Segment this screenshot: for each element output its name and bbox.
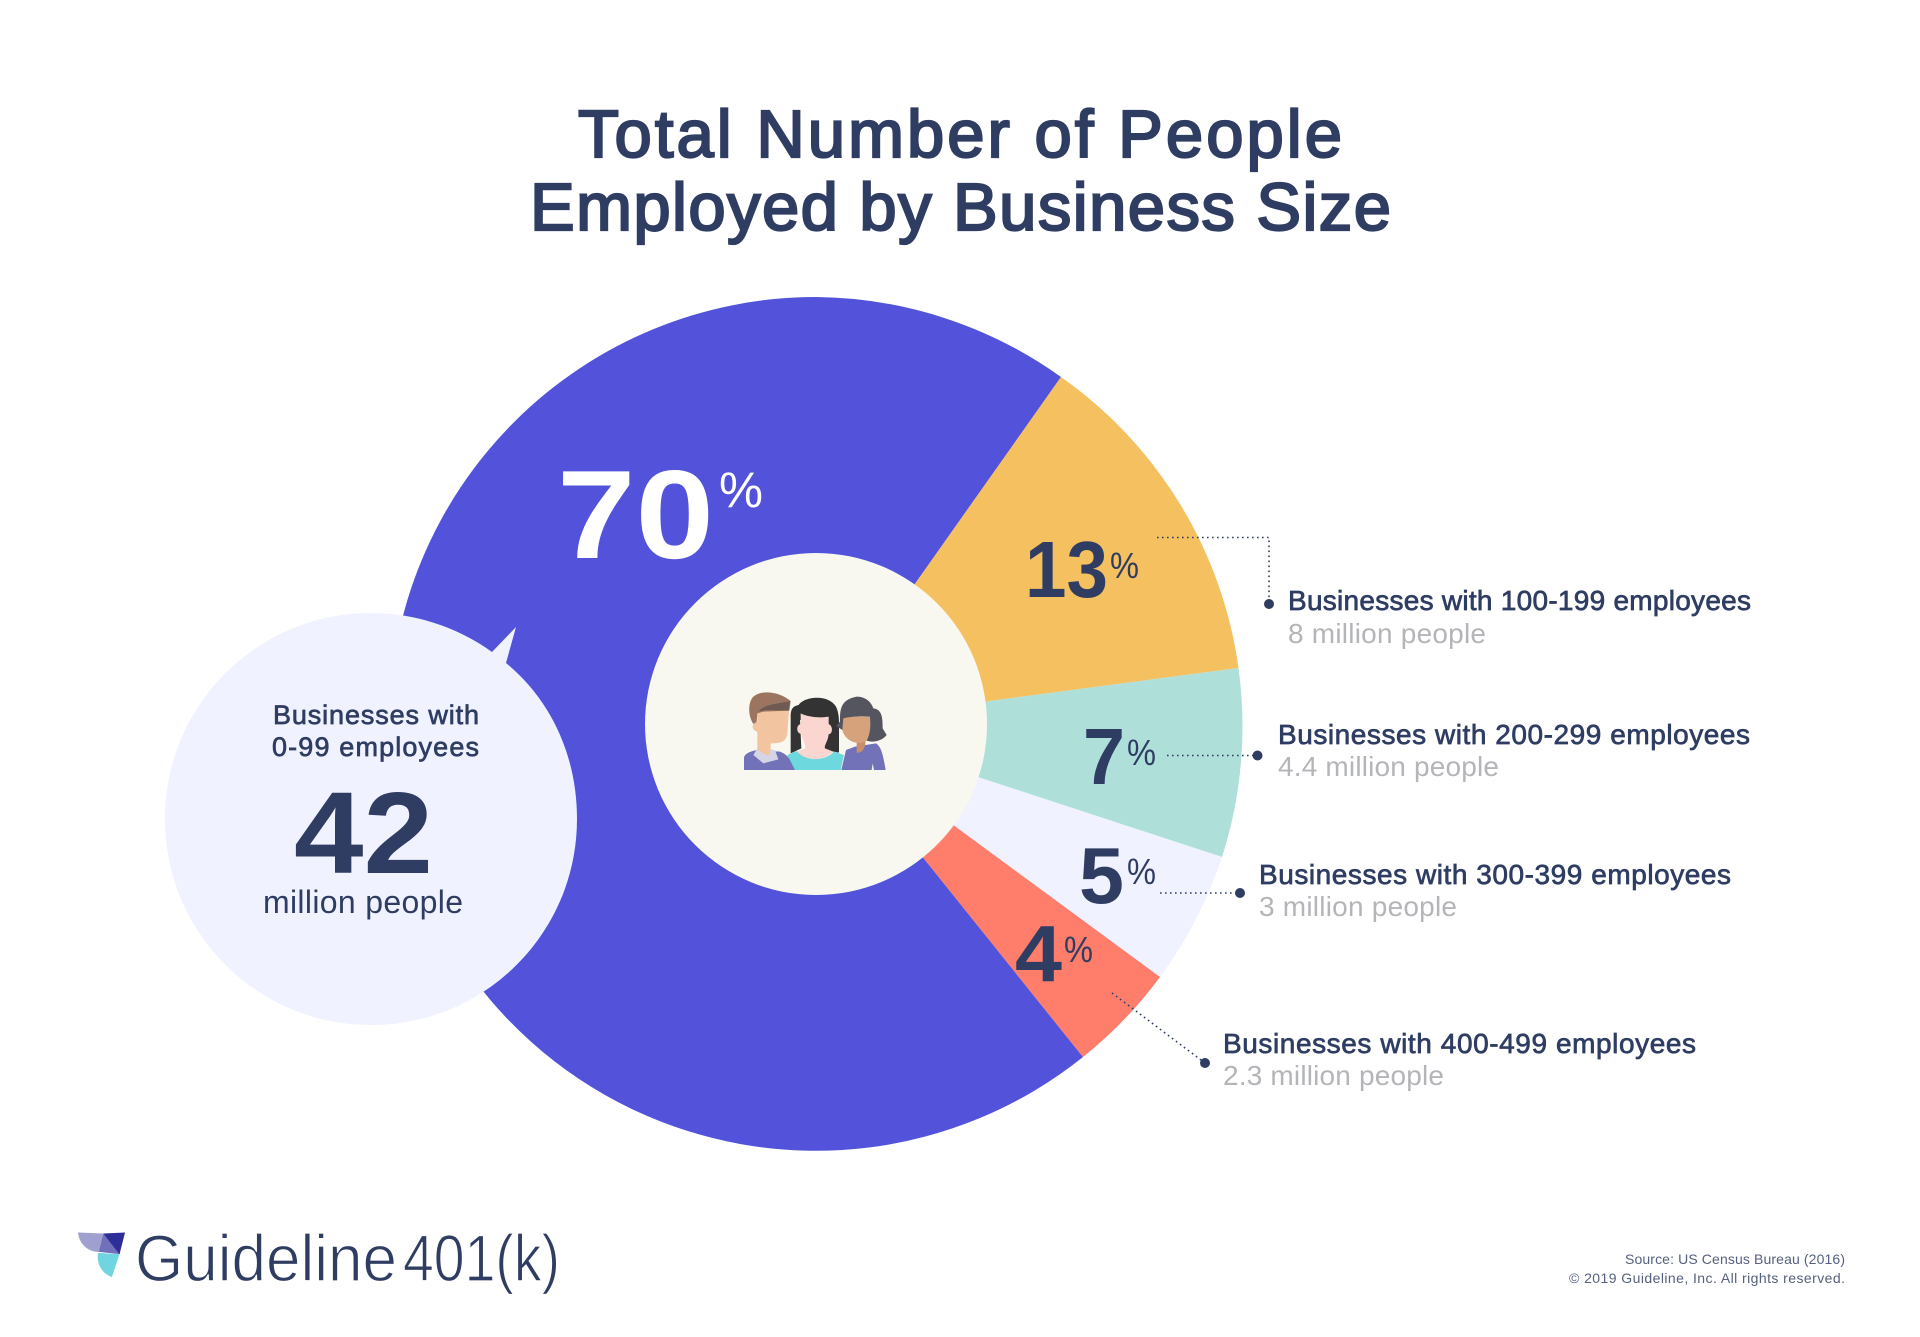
legend: 100-199 employees: Businesses with 100-199 employees (1288, 585, 1751, 616)
source note: © 2019 Guideline, Inc. All rights reserved. (1569, 1270, 1845, 1286)
legend: 300-399 employees: Businesses with 300-399 employees (1259, 859, 1731, 890)
segment: 300-399 employees 5% (816, 724, 1222, 977)
segment: 0-99 employees 70% (389, 297, 1083, 1151)
label: 7%: % (1127, 732, 1156, 773)
callout bubble (165, 613, 577, 1025)
callout: 0-99 employees: 0-99 employees (272, 732, 479, 762)
label: 5%: % (1127, 851, 1156, 892)
label: 5%: 5 (1079, 831, 1124, 920)
source note (1569, 1251, 1845, 1286)
legend: 200-299 employees: Businesses with 200-299 employees (1278, 719, 1750, 750)
icon: three people (744, 692, 887, 770)
label: 5% (1079, 831, 1156, 920)
legend: 200-299 employees: 4.4 million people (1278, 751, 1499, 782)
callout number: 42 (294, 768, 433, 898)
legend: 400-499 employees (1112, 993, 1696, 1091)
legend: 400-499 employees: Businesses with 400-499 employees (1223, 1028, 1696, 1059)
label: 70%: 70 (557, 444, 714, 585)
callout: 0-99 employees (165, 613, 577, 1025)
label: 4% (1015, 909, 1093, 998)
legend: 400-499 employees: 2.3 million people (1223, 1060, 1444, 1091)
legend: 300-399 employees (1160, 859, 1731, 922)
label: 13%: 13 (1025, 525, 1108, 614)
label: 7% (1083, 712, 1156, 801)
legend: 100-199 employees: 8 million people (1288, 618, 1486, 649)
woman right (836, 697, 887, 770)
legend: 200-299 employees (1167, 719, 1750, 782)
logo: 401(k) (403, 1221, 560, 1295)
label: 4%: % (1064, 929, 1093, 970)
label: 4%: 4 (1015, 909, 1063, 998)
logo wordmark: Guideline (135, 1221, 397, 1295)
label: 70%: % (719, 462, 763, 518)
segment: 400-499 employees 4% (816, 724, 1160, 1057)
woman center (787, 698, 844, 770)
title: Employed by Business Size (530, 170, 1391, 245)
center circle (645, 553, 987, 895)
icon: logo mark (78, 1232, 125, 1277)
title (530, 97, 1391, 245)
label: 70% (557, 444, 763, 585)
legend: 300-399 employees: 3 million people (1259, 891, 1457, 922)
title: Total Number of People (578, 97, 1342, 172)
callout heading: Businesses with (273, 700, 479, 730)
legend: 100-199 employees (1157, 538, 1751, 649)
logo (78, 1221, 560, 1295)
man (744, 692, 795, 770)
donut chart (389, 297, 1242, 1151)
label: 7%: 7 (1083, 712, 1125, 801)
segment: 200-299 employees 7% (816, 668, 1242, 857)
label: 13%: % (1110, 545, 1139, 586)
callout unit: million people (263, 884, 463, 920)
segment: 100-199 employees 13% (816, 377, 1238, 724)
source note: Source: US Census Bureau (2016) (1625, 1251, 1845, 1267)
